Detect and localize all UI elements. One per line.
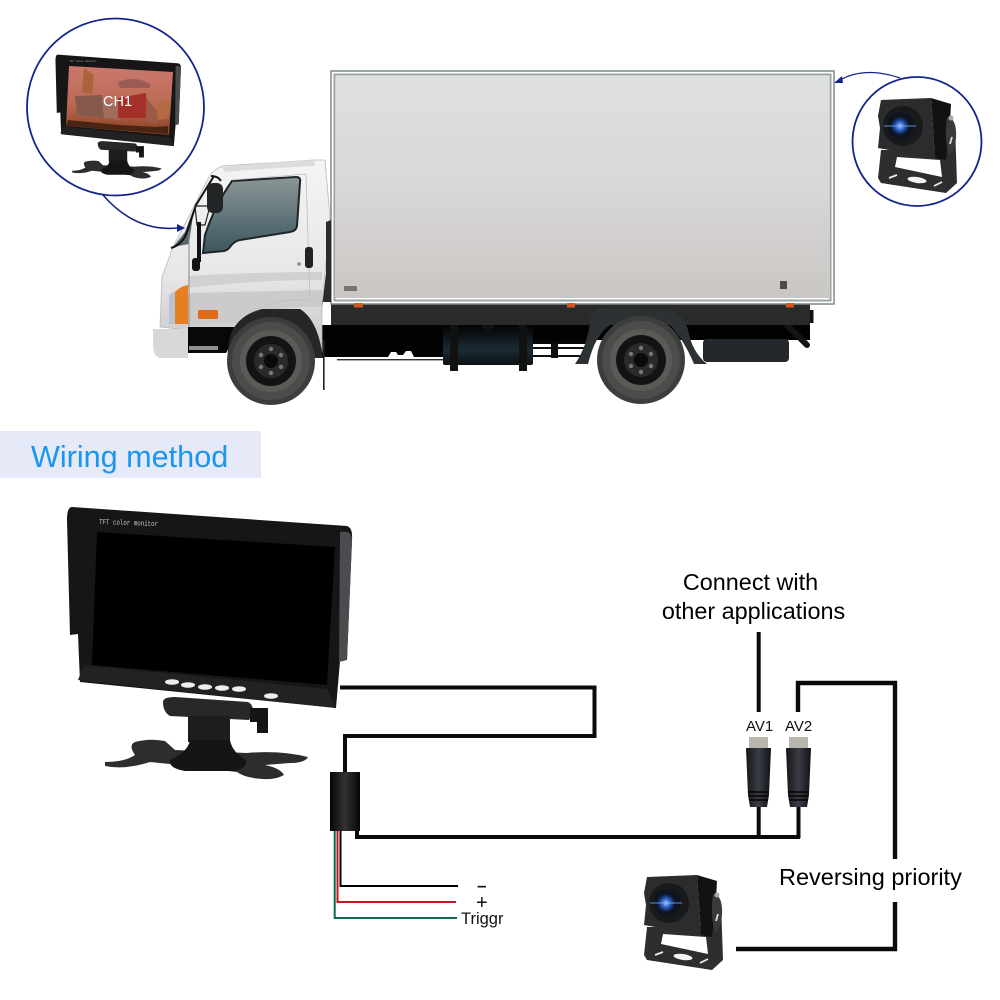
cab [153, 160, 331, 358]
inset camera [878, 98, 957, 193]
inset trucks on screen [66, 68, 170, 134]
label: minus: – [477, 876, 486, 895]
negative wire [340, 831, 458, 886]
trigger wire [335, 831, 457, 918]
label: AV2: AV2 [785, 718, 812, 735]
reversing camera [644, 875, 723, 970]
rear fender [575, 308, 707, 364]
label: connect with other applications [662, 569, 845, 624]
inset monitor caption: TFT color monitor [70, 59, 96, 63]
callout: monitor inset [27, 18, 204, 196]
callout: camera inset [852, 77, 982, 206]
monitor [67, 507, 352, 779]
panel: truck side view [153, 71, 834, 405]
splitter box [330, 772, 360, 831]
inset screen [66, 66, 173, 135]
arrow: camera to box [834, 72, 900, 83]
positive wire [338, 831, 456, 902]
inset label CH1: CH1 [103, 94, 132, 110]
connector AV2 [786, 737, 811, 807]
label: reversing priority: Reversing priority [779, 864, 962, 890]
inset monitor [55, 55, 181, 179]
label: plus: + [476, 892, 488, 914]
rear chassis and underbody [322, 302, 814, 390]
rear wheel [597, 316, 685, 404]
monitor caption: TFT color monitor [99, 519, 158, 529]
heading: wiring method: Wiring method [31, 440, 228, 474]
monitor screen [92, 532, 335, 685]
power wires [335, 831, 458, 918]
monitor buttons [165, 679, 278, 699]
connector AV1 [746, 737, 771, 807]
cargo box [331, 71, 834, 308]
wiring cables [340, 632, 895, 949]
label: AV1: AV1 [746, 718, 773, 735]
heading: wiring method [0, 431, 261, 478]
front wheel [227, 317, 315, 405]
label: connect with other applications: Connect with [683, 569, 818, 595]
arrow: monitor to cab [103, 195, 185, 232]
label: trigger: Triggr [461, 910, 504, 928]
label: connect with other applications: other applications [662, 598, 845, 624]
